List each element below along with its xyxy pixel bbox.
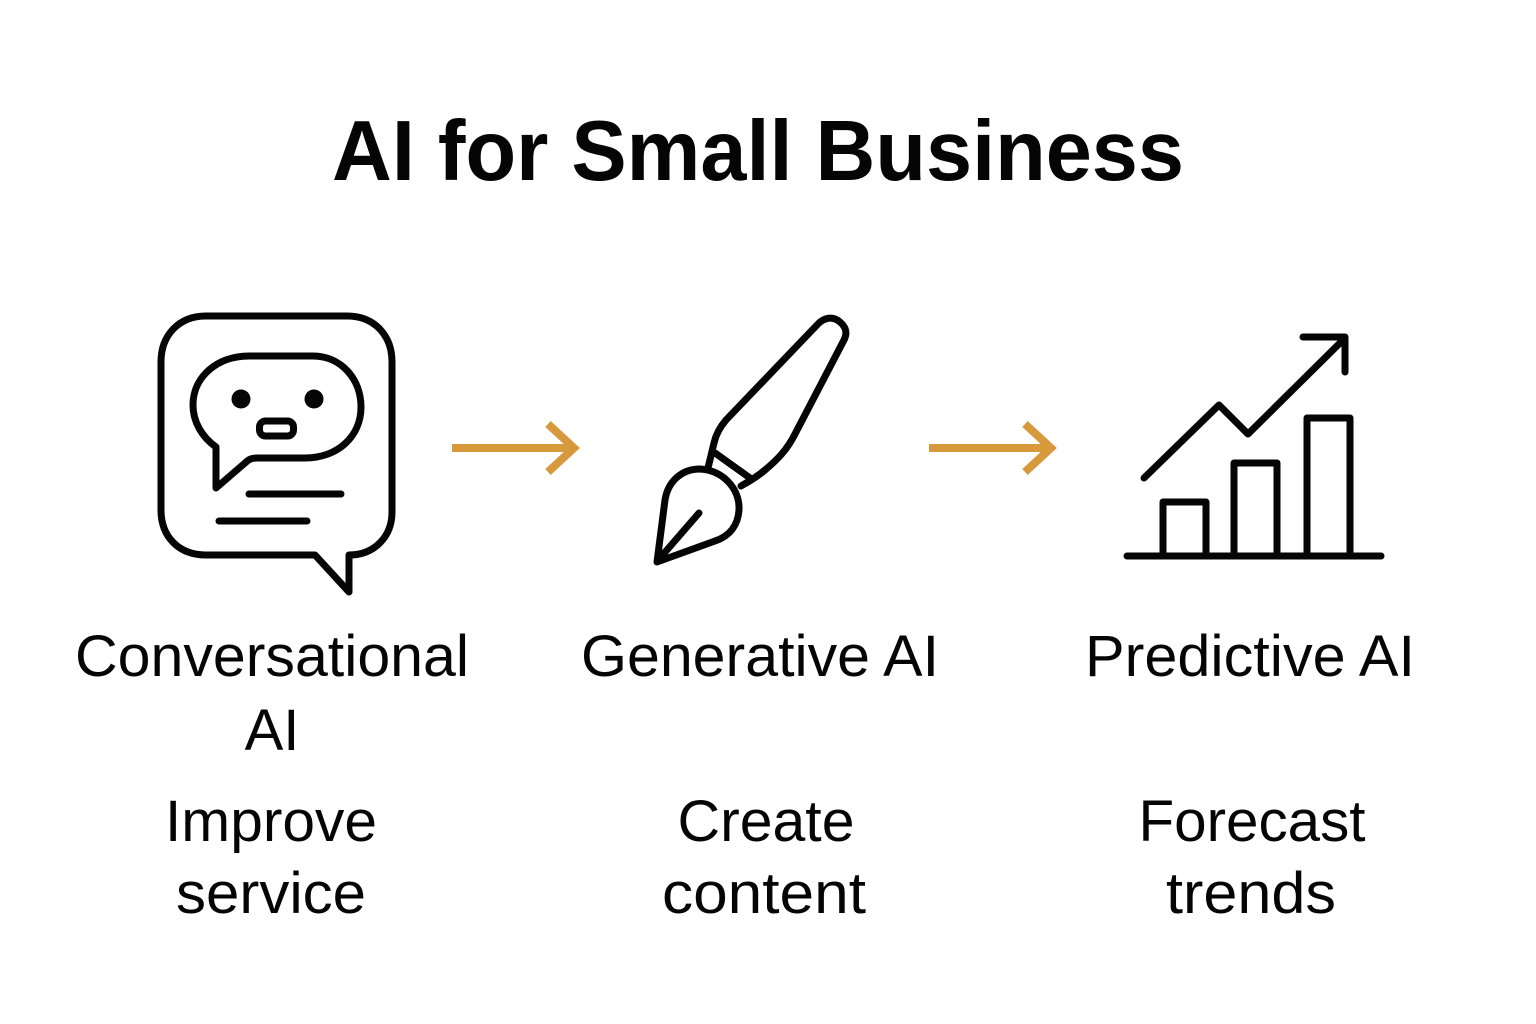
arrow: generative to predictive: [929, 424, 1051, 472]
arrow: conversational to generative: [452, 424, 574, 472]
description: Forecast trends: Forecast: [1138, 789, 1366, 854]
label: Predictive AI: Predictive AI: [1085, 624, 1415, 689]
label: Generative AI: Generative AI: [581, 624, 939, 689]
description: Create content: Create: [678, 789, 854, 854]
description: Forecast trends: trends: [1166, 861, 1336, 926]
label: Conversational AI: [75, 624, 469, 763]
description: Create content: [662, 789, 866, 926]
title: AI for Small Business: [332, 104, 1184, 199]
description: Create content: content: [662, 861, 866, 926]
description: Improve service: service: [176, 861, 366, 926]
label: Conversational AI: AI: [245, 698, 299, 763]
description: Improve service: [165, 789, 377, 926]
icon: paintbrush: [657, 318, 846, 562]
icon: bar chart with rising arrow: [1127, 337, 1381, 556]
description: Forecast trends: [1138, 789, 1366, 926]
icon: conversational AI chat bubble: [161, 316, 392, 592]
label: Conversational AI: Conversational: [75, 624, 469, 689]
description: Improve service: Improve: [165, 789, 377, 854]
